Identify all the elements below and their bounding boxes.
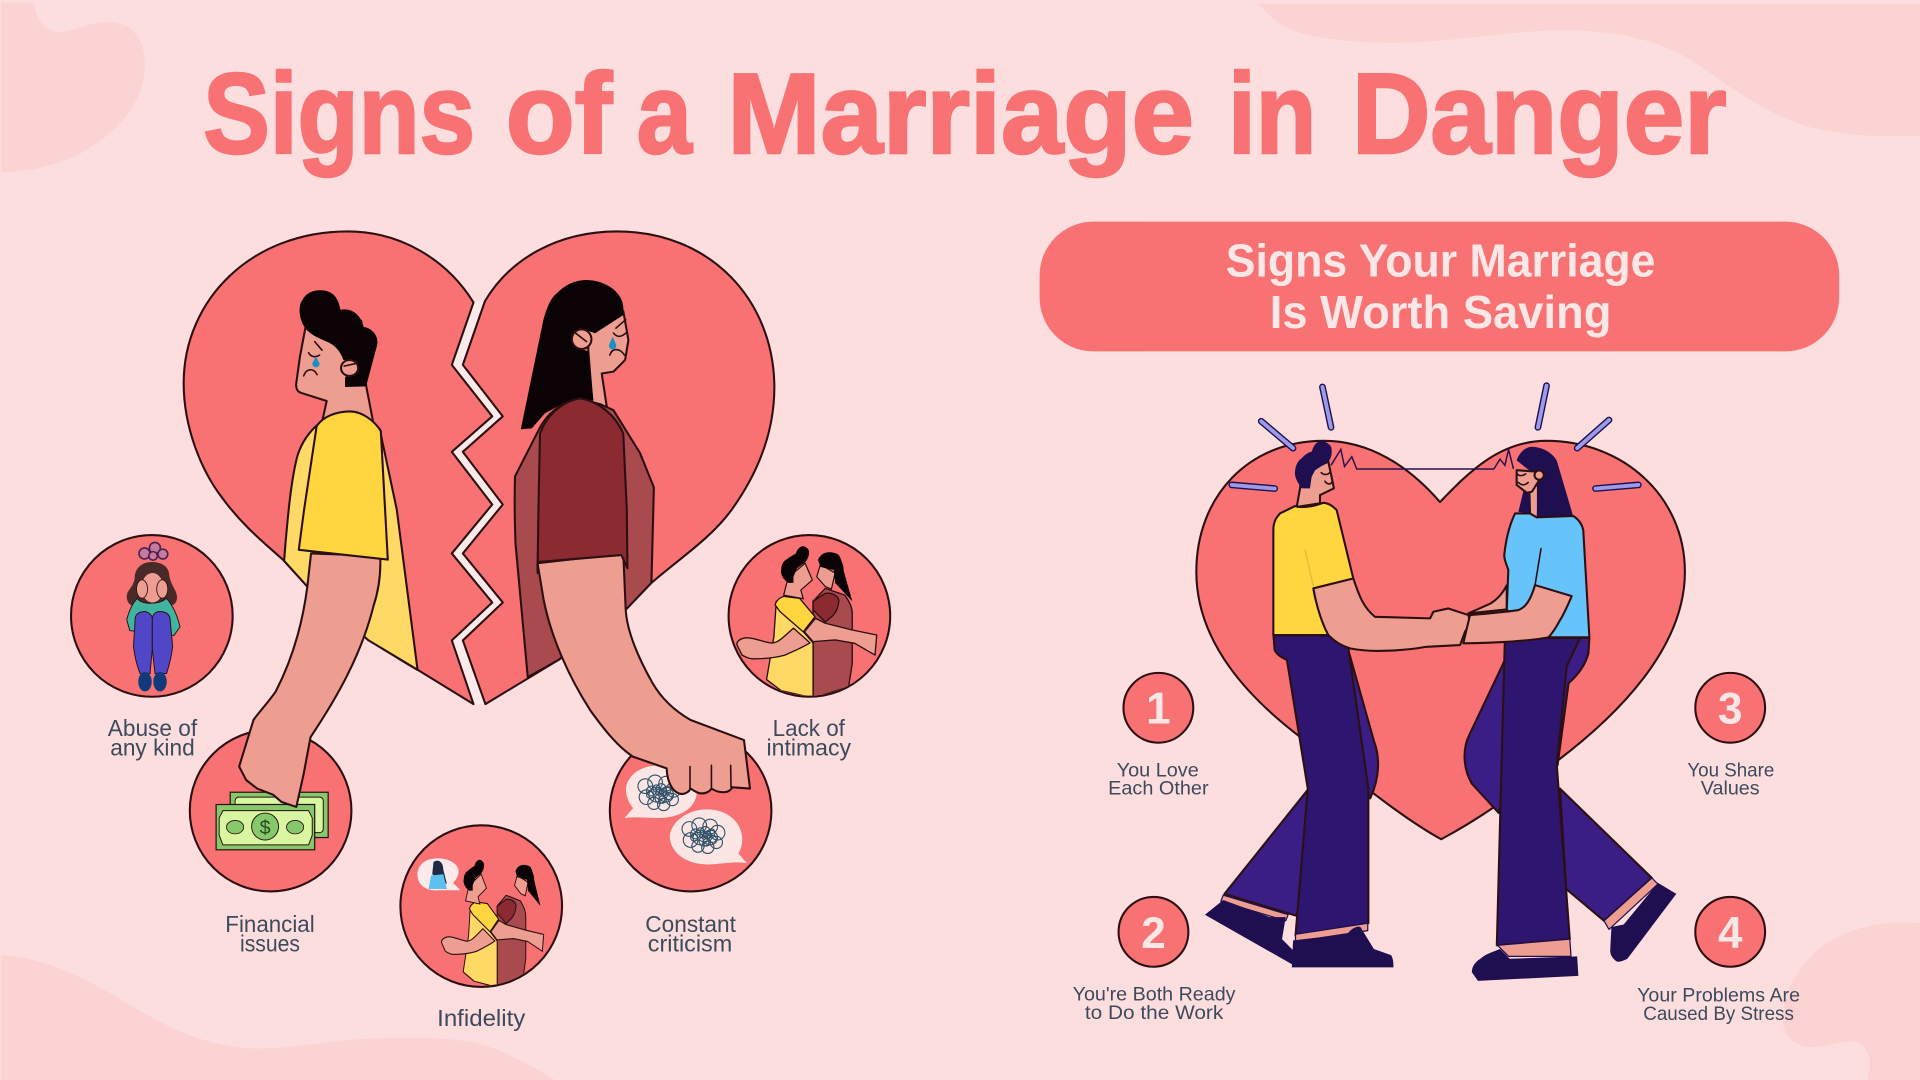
heartbeat line bbox=[1331, 449, 1513, 469]
woman arm reaching down bbox=[538, 553, 750, 794]
icon: intimacy circle bbox=[729, 535, 890, 697]
woman hair bbox=[1517, 447, 1573, 517]
heart left half bbox=[184, 231, 492, 704]
label: financial issues: Financial bbox=[225, 911, 315, 937]
title: of bbox=[506, 51, 613, 178]
item 1 bbox=[1108, 673, 1209, 800]
icon: abuse circle bbox=[71, 535, 233, 697]
man arm bbox=[1313, 578, 1470, 651]
sign: financial issues bbox=[190, 730, 351, 956]
icon: money bills bbox=[216, 792, 328, 850]
pill heading: Is Worth Saving bbox=[1270, 286, 1611, 338]
label: lack of intimacy: intimacy bbox=[767, 735, 851, 761]
woman face bbox=[1517, 470, 1539, 493]
icon: hugging couple with thought bubble bbox=[417, 858, 544, 987]
man sad face details bbox=[304, 342, 355, 376]
woman hair bbox=[521, 280, 623, 429]
title: in bbox=[1228, 51, 1316, 178]
crack band bbox=[452, 300, 503, 704]
label: you share values: You Share bbox=[1687, 760, 1774, 781]
woman hip bbox=[1555, 638, 1589, 765]
man back cuff bbox=[1221, 895, 1288, 921]
title: Danger bbox=[1352, 51, 1727, 178]
woman body shirt bbox=[515, 399, 654, 677]
label: constant criticism: Constant bbox=[645, 911, 736, 937]
number 3: 3 bbox=[1718, 685, 1742, 734]
icon: financial circle bbox=[190, 730, 351, 891]
man ear bbox=[341, 360, 358, 376]
man front shoe bbox=[1292, 927, 1393, 967]
label: financial issues: issues bbox=[240, 930, 300, 956]
man face details bbox=[1321, 473, 1332, 484]
man shirt fold bbox=[1305, 550, 1313, 587]
sign: lack of intimacy bbox=[729, 535, 890, 761]
icon: infidelity circle bbox=[400, 825, 562, 987]
woman neck and face bbox=[588, 311, 628, 407]
label: your problems are caused by stress: Your Problems Are bbox=[1637, 986, 1800, 1007]
label: infidelity: Infidelity bbox=[437, 1005, 526, 1031]
label: financial issues bbox=[225, 911, 315, 956]
label: you love each other: Each Other bbox=[1108, 779, 1209, 800]
label: lack of intimacy bbox=[767, 715, 851, 761]
background blob: top left bbox=[1, 2, 145, 173]
title: Marriage bbox=[727, 51, 1194, 178]
number 2: 2 bbox=[1141, 909, 1166, 958]
woman back arm bbox=[1468, 585, 1507, 613]
woman face details bbox=[1517, 474, 1528, 485]
label: you're both ready to do the work: to Do the Work bbox=[1085, 1003, 1224, 1024]
icon: speech bubble two bbox=[670, 809, 747, 864]
icon: money bills: $ bbox=[260, 817, 271, 839]
man arm reaching down bbox=[239, 553, 380, 807]
man shirt bbox=[1273, 503, 1353, 635]
label: your problems are caused by stress: Caused By Stress bbox=[1643, 1004, 1794, 1025]
woman back knee and hip bbox=[1465, 660, 1518, 813]
panel: right illustration, couple holding hands bbox=[1196, 386, 1685, 981]
woman finger lines bbox=[690, 765, 731, 789]
radiating rays bbox=[1232, 386, 1638, 489]
background blob: bottom left bbox=[1, 955, 555, 1080]
woman shirt bbox=[1504, 513, 1589, 637]
number badge 1 bbox=[1123, 673, 1193, 743]
icon: woman hiding face bbox=[127, 542, 180, 691]
pill heading: Signs Your Marriage bbox=[1226, 235, 1656, 287]
number badge 4 bbox=[1695, 897, 1765, 967]
label: you're both ready to do the work bbox=[1073, 984, 1236, 1024]
heart right half bbox=[463, 231, 774, 704]
woman shirt sleeve bbox=[538, 398, 627, 573]
man standing left bbox=[1205, 441, 1470, 967]
man shirt sleeve bbox=[299, 411, 388, 560]
man back knee bbox=[1349, 654, 1378, 798]
sign: infidelity bbox=[400, 825, 562, 1031]
woman front leg bbox=[1497, 638, 1580, 945]
label: abuse of any kind: Abuse of bbox=[108, 715, 198, 741]
man, sad, facing left bbox=[239, 290, 418, 807]
label: lack of intimacy: Lack of bbox=[773, 715, 845, 741]
man front leg bbox=[1273, 636, 1368, 936]
label: you love each other: You Love bbox=[1117, 760, 1199, 781]
man neck and face bbox=[1297, 462, 1334, 507]
woman, sad, facing right bbox=[515, 280, 750, 794]
woman neck bbox=[1529, 484, 1538, 518]
label: you share values: Values bbox=[1701, 779, 1760, 800]
woman back cuff bbox=[1604, 878, 1658, 929]
background blob: top right bbox=[1259, 4, 1920, 136]
label: abuse of any kind: any kind bbox=[110, 735, 195, 761]
man hair bbox=[1295, 441, 1332, 488]
item 4 bbox=[1637, 897, 1800, 1025]
label: constant criticism: criticism bbox=[648, 930, 732, 956]
icon: speech bubble one bbox=[624, 765, 697, 818]
header pill: signs your marriage is worth saving bbox=[1040, 222, 1839, 351]
title: Signs bbox=[203, 51, 475, 178]
background blob: bottom right bbox=[1783, 922, 1920, 1080]
woman back leg bbox=[1560, 789, 1652, 921]
man back leg bbox=[1224, 790, 1322, 916]
woman sleeve line bbox=[1535, 549, 1541, 585]
title: a bbox=[637, 51, 693, 178]
woman arm bbox=[1463, 585, 1572, 643]
number 4: 4 bbox=[1718, 909, 1743, 958]
item 2 bbox=[1073, 897, 1236, 1024]
number 1: 1 bbox=[1146, 685, 1171, 734]
woman ear bbox=[572, 329, 591, 349]
icon: criticism circle bbox=[610, 730, 771, 891]
label: constant criticism bbox=[645, 911, 736, 956]
woman sad face details bbox=[576, 320, 626, 355]
pill heading bbox=[1226, 235, 1656, 338]
label: abuse of any kind bbox=[108, 715, 198, 761]
sign: constant criticism bbox=[610, 730, 771, 956]
woman front shoe bbox=[1472, 949, 1578, 981]
woman ear bbox=[1535, 470, 1544, 480]
number badge 2 bbox=[1119, 897, 1188, 967]
man neck and face bbox=[296, 321, 373, 424]
whole heart bbox=[1196, 441, 1685, 839]
item 3 bbox=[1687, 673, 1774, 800]
label: your problems are caused by stress bbox=[1637, 986, 1800, 1025]
man back shoe bbox=[1205, 900, 1293, 965]
woman front cuff bbox=[1498, 939, 1571, 956]
panel: left illustration, signs of danger bbox=[71, 231, 890, 1031]
woman back shoe bbox=[1610, 883, 1676, 962]
icon: hugging couple bbox=[737, 546, 877, 698]
woman standing right bbox=[1463, 447, 1676, 981]
man body shirt bbox=[284, 421, 418, 670]
sign: abuse of any kind bbox=[71, 535, 233, 761]
broken heart bbox=[184, 231, 774, 704]
label: you love each other bbox=[1108, 760, 1209, 800]
title bbox=[203, 51, 1727, 178]
man front cuff bbox=[1296, 923, 1368, 942]
man hair bbox=[300, 290, 377, 387]
label: you share values bbox=[1687, 760, 1774, 800]
number badge 3 bbox=[1695, 673, 1765, 743]
pill background bbox=[1040, 222, 1839, 351]
label: you're both ready to do the work: You're Both Ready bbox=[1073, 984, 1236, 1005]
